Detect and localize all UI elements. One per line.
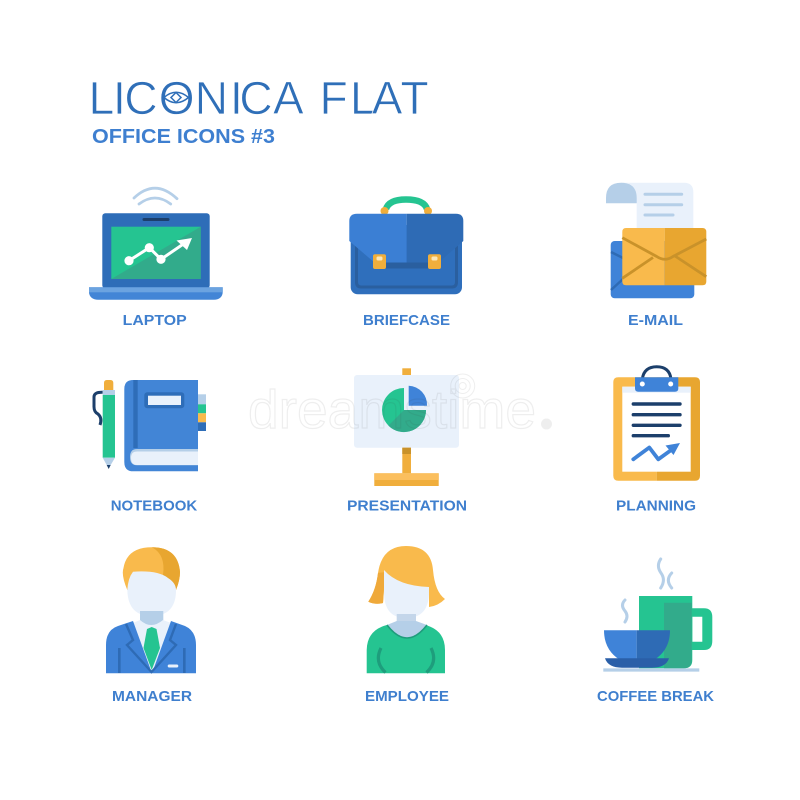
icon: planning clipboard bbox=[613, 367, 700, 481]
label: manager: MANAGER bbox=[112, 688, 192, 705]
subtitle: OFFICE ICONS #3 bbox=[92, 126, 275, 148]
icon: coffee break bbox=[603, 559, 712, 670]
icon: notebook bbox=[94, 380, 206, 471]
label: laptop: LAPTOP bbox=[123, 312, 187, 329]
title: LICONICA FLAT bbox=[89, 72, 429, 124]
label: briefcase: BRIEFCASE bbox=[363, 312, 450, 329]
icon: laptop bbox=[89, 188, 223, 300]
label: presentation: PRESENTATION bbox=[347, 498, 467, 514]
icon: manager bbox=[106, 547, 196, 673]
icon: eye in title O bbox=[164, 92, 188, 103]
icon: employee bbox=[367, 546, 445, 673]
label: planning: PLANNING bbox=[616, 498, 696, 514]
icon: e-mail bbox=[606, 183, 706, 298]
icon: briefcase bbox=[349, 200, 463, 294]
icon: presentation board bbox=[354, 368, 459, 486]
label: e-mail: E-MAIL bbox=[628, 312, 683, 329]
watermark: dreamstime bbox=[248, 380, 536, 440]
label: notebook: NOTEBOOK bbox=[111, 498, 197, 514]
label: employee: EMPLOYEE bbox=[365, 688, 449, 705]
label: coffee break: COFFEE BREAK bbox=[597, 688, 714, 705]
